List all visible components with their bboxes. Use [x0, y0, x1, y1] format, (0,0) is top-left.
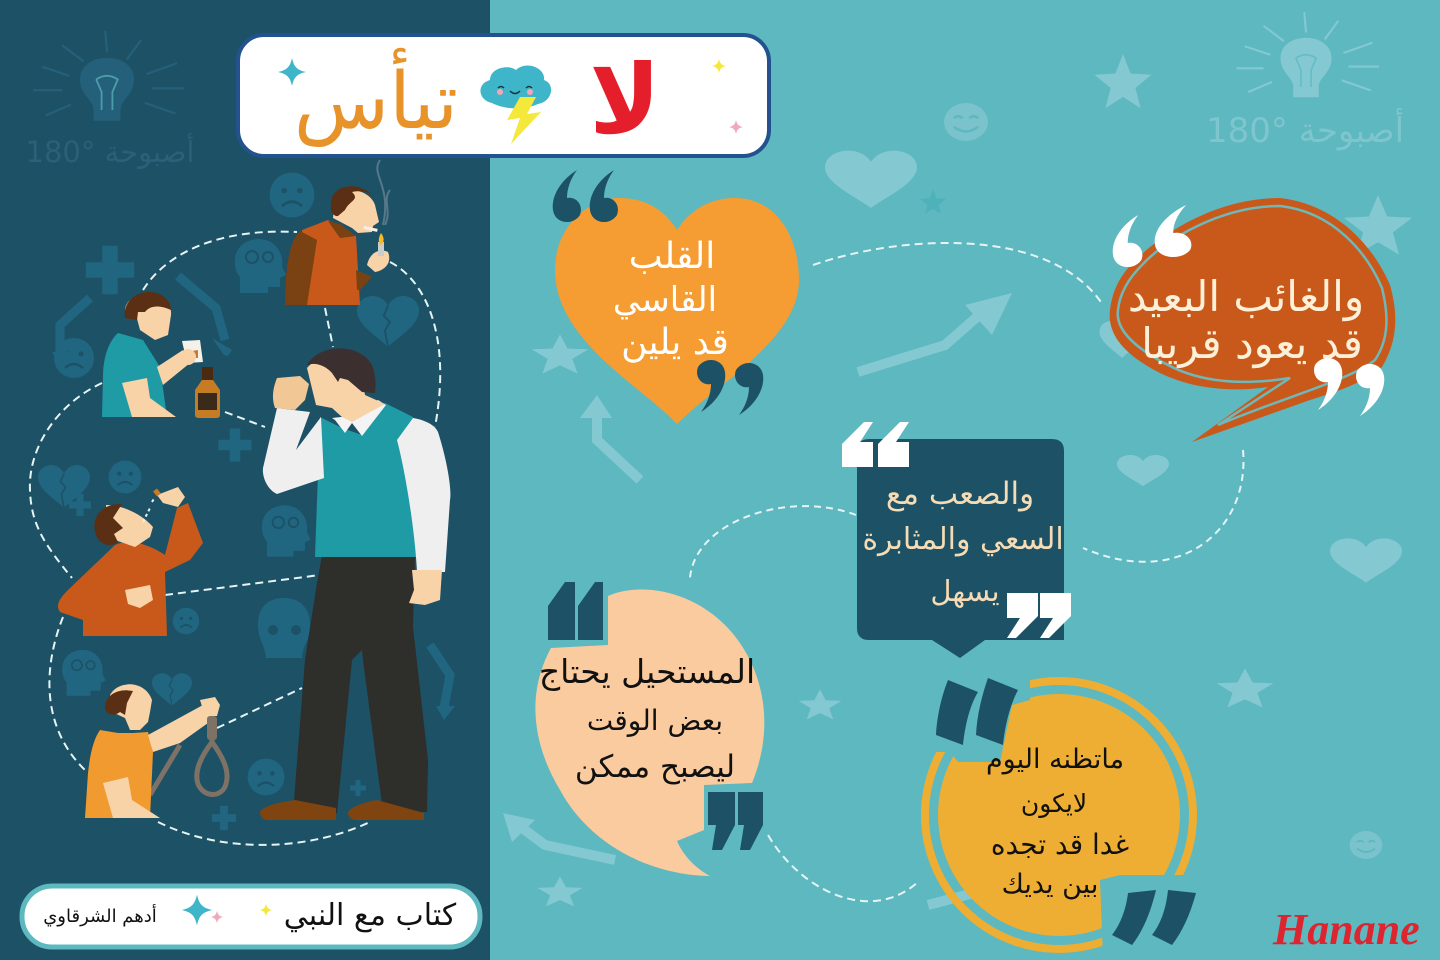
opening quote marks	[1113, 205, 1191, 267]
sparkle yellow	[712, 59, 726, 73]
box text	[862, 476, 1064, 608]
closing quote marks	[1112, 890, 1196, 945]
title word: tay'as: تيأس	[294, 48, 458, 147]
faint broken hearts	[38, 296, 419, 706]
sparkle teal	[278, 58, 306, 86]
faint sad faces	[54, 173, 314, 795]
opening quote marks	[936, 678, 1018, 745]
sparkle pink	[729, 120, 743, 134]
signature: Hanane: Hanane	[1272, 905, 1420, 954]
quote card: yellow circle	[920, 672, 1205, 958]
faint heads	[62, 239, 311, 696]
box text: والصعب مع	[886, 476, 1034, 512]
fist	[273, 376, 309, 410]
background: left navy panel	[0, 0, 490, 960]
circle text: ماتظنه اليوم	[986, 744, 1124, 775]
faint plus signs	[69, 246, 366, 830]
title panel	[238, 35, 769, 156]
sparkles	[182, 895, 272, 925]
figure: man holding a noose	[85, 684, 227, 818]
bubble text: والغائب البعيد	[1128, 272, 1364, 321]
figure: man drinking from a glass	[102, 292, 203, 417]
heart text	[613, 236, 729, 363]
closing quote marks	[708, 792, 763, 850]
faint stars	[532, 54, 1412, 906]
closing quote marks	[1314, 358, 1384, 416]
trousers	[293, 555, 428, 813]
bubble text: المستحيل يحتاج	[539, 652, 755, 692]
box text: يسهل	[930, 574, 1000, 608]
faint skull	[258, 598, 310, 658]
quote card: orange speech bubble	[1110, 198, 1395, 442]
figure: man swallowing pills	[58, 487, 203, 636]
icon: storm cloud with lightning	[480, 65, 551, 144]
bubble text	[1128, 272, 1364, 368]
closing quote marks	[697, 360, 763, 415]
quote card: heart	[553, 170, 799, 424]
hair	[307, 348, 375, 393]
heart text: القاسي	[613, 280, 717, 320]
icon: light bulb right	[1236, 12, 1379, 97]
closing quote marks	[1007, 593, 1071, 638]
neck and face	[307, 358, 385, 422]
opening quote marks	[842, 422, 909, 467]
watermark text left: أصبوحة °180	[26, 132, 194, 169]
shirt collar	[332, 400, 386, 436]
faint arrows	[518, 310, 985, 905]
shoes	[260, 800, 336, 820]
watermark icons on left panel	[26, 31, 455, 830]
bubble text	[539, 652, 755, 785]
opening quote marks	[553, 170, 618, 222]
vest	[315, 403, 418, 557]
background: right teal panel	[490, 0, 1440, 960]
circle text: بين يديك	[1002, 869, 1098, 900]
icon: light bulb left	[33, 31, 184, 121]
circle text	[986, 744, 1129, 900]
circle text: غدا قد تجده	[991, 828, 1129, 861]
watermark icons on right panel	[503, 12, 1412, 906]
white shirt sleeve right	[397, 418, 450, 572]
heart text: قد يلين	[621, 322, 729, 363]
dashed connector lines right	[690, 243, 1243, 901]
faint teal star	[920, 190, 946, 214]
footer pill	[22, 886, 480, 947]
opening quote marks	[548, 582, 603, 640]
quote card: peach speech bubble	[535, 582, 764, 876]
bubble text: ليصبح ممكن	[575, 749, 735, 785]
heart text: القلب	[629, 236, 715, 277]
author name: أدهم الشرقاوي	[43, 904, 157, 927]
hand at side	[409, 570, 442, 605]
figure: smoking man	[285, 160, 390, 305]
watermark text right: أصبوحة °180	[1206, 108, 1404, 151]
quote card: navy box	[842, 422, 1071, 658]
box text: السعي والمثابرة	[862, 522, 1064, 557]
faint smileys	[944, 103, 1382, 859]
bubble text: قد يعود قريبا	[1141, 319, 1363, 368]
icon: whisky bottle	[195, 367, 220, 418]
faint hearts	[825, 151, 1402, 583]
title word: la: لا	[589, 44, 661, 156]
dashed connector lines left	[30, 232, 440, 845]
circle text: لايكون	[1021, 789, 1087, 818]
faint arrows	[60, 276, 450, 708]
white shirt sleeve left	[263, 408, 324, 494]
notches behind quotes	[920, 672, 1205, 958]
figure: main man covering his face	[260, 348, 450, 820]
bubble text: بعض الوقت	[587, 704, 723, 737]
book title: كتاب مع النبي	[284, 898, 457, 933]
